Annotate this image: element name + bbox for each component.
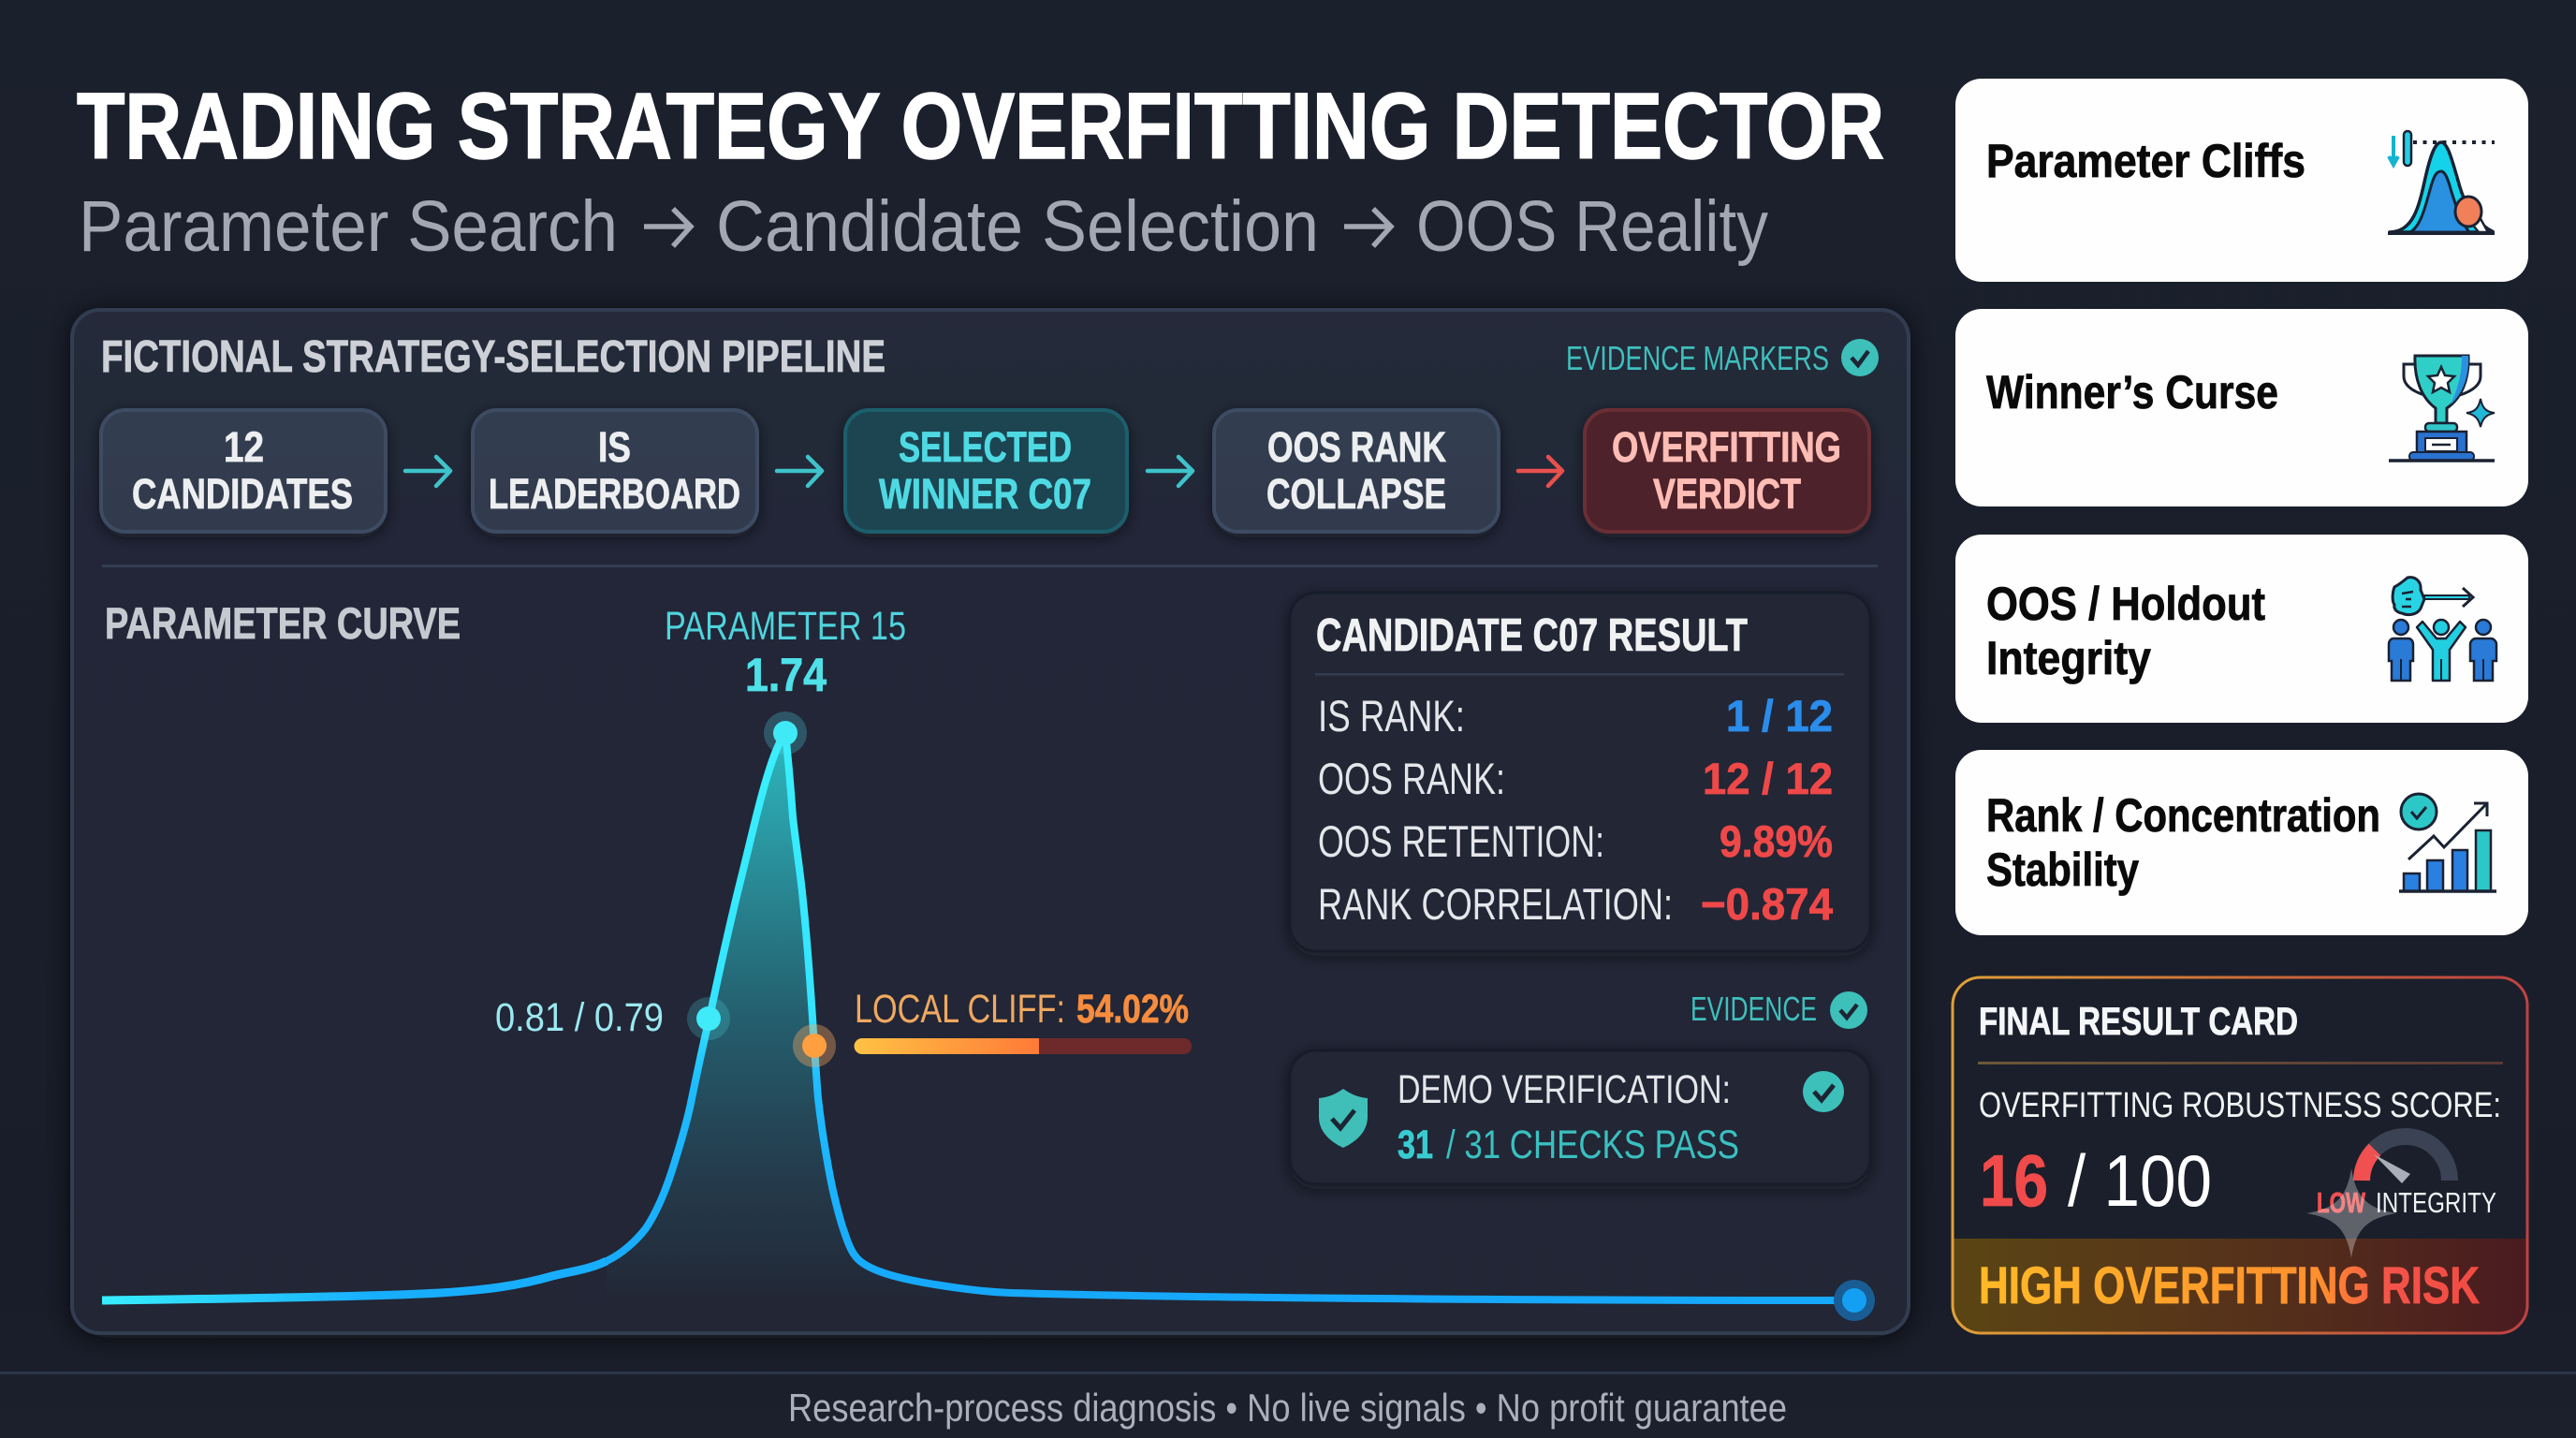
step: OOS rank collapse: COLLAPSE (1266, 470, 1446, 518)
step: 12 candidates (101, 410, 386, 532)
verification text: DEMO VERIFICATION: (1398, 1067, 1731, 1112)
card: winner's curse (1955, 309, 2528, 506)
icon: check (1803, 1071, 1844, 1112)
icon: trophy (2389, 356, 2495, 461)
verdict band (1953, 1239, 2527, 1333)
step: selected winner C07: WINNER C07 (879, 470, 1091, 518)
subtitle: Candidate Selection (716, 186, 1319, 267)
row: OOS rank: 12 / 12 (1703, 754, 1833, 803)
row: OOS retention: 9.89% (1720, 816, 1833, 866)
icon: stability chart (2399, 794, 2496, 891)
row: OOS rank (1318, 754, 1833, 803)
integrity label: LOW (2317, 1186, 2366, 1219)
step: 12 candidates: CANDIDATES (132, 470, 353, 518)
integrity label: INTEGRITY (2376, 1186, 2496, 1219)
card: winner's curse: Winner’s Curse (1986, 366, 2278, 418)
score value (1980, 1139, 2212, 1222)
row: rank correlation: −0.874 (1701, 879, 1833, 929)
step: IS leaderboard (473, 410, 757, 532)
row: OOS rank: OOS RANK: (1318, 754, 1505, 803)
gauge (2362, 1137, 2450, 1183)
chart heading: PARAMETER CURVE (105, 598, 461, 648)
score value: / 100 (2068, 1139, 2212, 1222)
local cliff label: LOCAL CLIFF: (855, 987, 1065, 1032)
card: OOS / holdout integrity (1955, 535, 2528, 723)
parameter curve chart (102, 598, 1875, 1321)
evidence markers badge: EVIDENCE MARKERS (1566, 339, 1829, 377)
card heading: CANDIDATE C07 RESULT (1316, 610, 1748, 661)
verification text (1398, 1067, 1739, 1167)
panel: fictional strategy-selection pipeline (72, 310, 1909, 1333)
card: candidate C07 result (1290, 593, 1870, 951)
step: OOS rank collapse (1214, 410, 1499, 532)
arrow (777, 457, 822, 486)
footer note: Research-process diagnosis • No live signals • No profit guarantee (788, 1386, 1787, 1430)
cliff marker (793, 1024, 836, 1067)
card: parameter cliffs: Parameter Cliffs (1986, 135, 2305, 187)
icon: shield (1319, 1089, 1368, 1148)
curve line (607, 733, 1854, 1300)
step: IS leaderboard: LEADERBOARD (489, 470, 740, 518)
step: selected winner C07 (845, 410, 1127, 532)
shoulder label: 0.81 / 0.79 (495, 995, 664, 1040)
step: overfitting verdict: OVERFITTING (1612, 423, 1841, 471)
peak label (665, 604, 906, 701)
card: OOS / holdout integrity: Integrity (1986, 632, 2151, 684)
end marker (1834, 1280, 1875, 1321)
step: IS leaderboard: IS (598, 423, 631, 471)
local cliff bar (854, 1038, 1192, 1054)
card: rank / concentration stability: Stability (1986, 844, 2139, 896)
shoulder marker (687, 997, 730, 1040)
subtitle: Parameter Search (79, 186, 618, 267)
card: demo verification (1290, 1050, 1870, 1184)
step: 12 candidates: 12 (224, 423, 264, 471)
peak marker (764, 712, 807, 755)
area under peak (607, 733, 941, 1297)
row: IS rank (1318, 691, 1833, 741)
peak label: 1.74 (745, 649, 827, 701)
icon: cliff curve (2388, 131, 2495, 233)
score value: 16 (1980, 1139, 2048, 1222)
step: OOS rank collapse: OOS RANK (1267, 423, 1446, 471)
sparkle watermark (2306, 1168, 2396, 1258)
evidence badge: EVIDENCE (1690, 990, 1817, 1028)
row: rank correlation: RANK CORRELATION: (1318, 879, 1673, 929)
card: rank / concentration stability (1955, 750, 2528, 935)
arrow (1148, 457, 1193, 486)
step: overfitting verdict (1585, 410, 1869, 532)
arrow (405, 457, 450, 486)
step: overfitting verdict: VERDICT (1653, 470, 1801, 518)
arrow: red (1518, 457, 1562, 486)
final card heading: FINAL RESULT CARD (1979, 999, 2298, 1043)
row: IS rank: 1 / 12 (1726, 691, 1833, 741)
card: rank / concentration stability: Rank / Concentration (1986, 789, 2380, 842)
integrity label (2317, 1186, 2496, 1219)
step: selected winner C07: SELECTED (899, 423, 1072, 471)
card: parameter cliffs (1955, 79, 2528, 282)
pipeline heading: FICTIONAL STRATEGY-SELECTION PIPELINE (101, 332, 886, 382)
peak label: PARAMETER 15 (665, 604, 906, 649)
icon: holdout team (2389, 578, 2496, 681)
subtitle: OOS Reality (1416, 186, 1768, 267)
local cliff label: 54.02% (1076, 987, 1189, 1032)
panel: final result card (1953, 977, 2527, 1333)
subtitle (79, 186, 1768, 267)
row: OOS retention: OOS RETENTION: (1318, 816, 1604, 866)
row: IS rank: IS RANK: (1318, 691, 1465, 741)
title: TRADING STRATEGY OVERFITTING DETECTOR (77, 74, 1884, 179)
verification text: 31 (1398, 1123, 1433, 1167)
card: OOS / holdout integrity: OOS / Holdout (1986, 578, 2265, 630)
verification text: / 31 CHECKS PASS (1446, 1123, 1739, 1167)
